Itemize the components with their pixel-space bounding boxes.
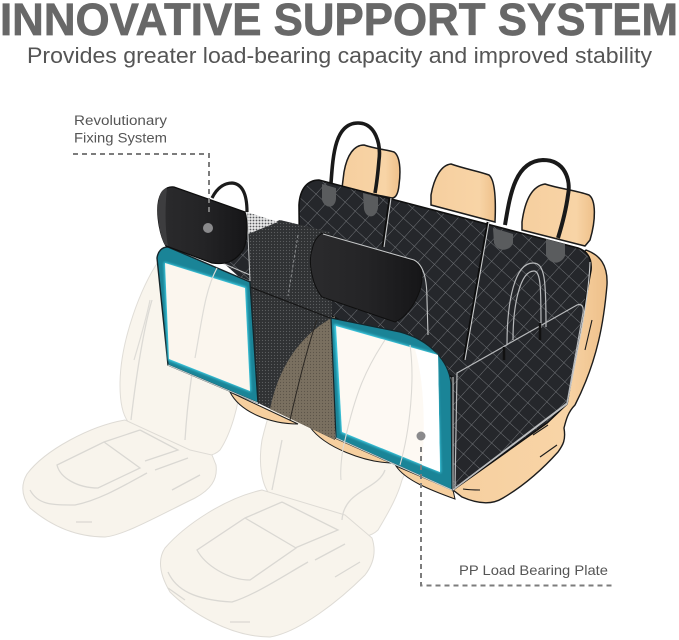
right front seat cushion [160,490,374,637]
callout label: Fixing System [74,130,167,146]
left side panel [157,247,258,403]
right load plate [336,326,440,472]
rear seat illustration [230,123,607,503]
left plate seams [134,268,217,360]
leader line [421,447,613,586]
headrest: right [522,184,594,246]
callout: Revolutionary Fixing System [73,113,213,233]
flap edge lines [222,212,250,281]
left cover side face [158,188,168,246]
right plate seams [341,340,412,480]
quilted back panel [299,180,591,490]
leader dot [416,432,426,440]
handle: left [331,123,379,193]
headrest cover highlight [323,234,428,335]
arched strap [507,263,546,345]
panel seams, light [384,198,590,490]
quilted flap behind left headrest cover [218,226,250,281]
tan strip: left [230,392,298,424]
strap ends [504,323,540,360]
panel seams, dark [383,198,488,360]
mesh stitched seam [288,235,298,296]
pocket outline [455,304,583,488]
headrest: left [342,145,400,198]
cushion stitch marks [463,320,592,490]
callout: PP Load Bearing Plate [416,432,613,586]
left cushion details [30,430,200,522]
ghost seat showing through mesh [270,316,335,440]
panel fold line [250,287,330,318]
left front seat backrest [120,262,245,456]
top mesh strip [247,212,278,234]
front seats, ghosted [23,262,421,637]
right cushion details [168,502,360,622]
left headrest cover handle [212,183,247,212]
right plate glow [334,324,441,473]
subtitle: Provides greater load-bearing capacity and improved stability [27,43,653,68]
left load plate [165,263,250,391]
tan strip: right [396,466,455,499]
strap tabs [322,184,565,263]
hammock mesh and side panels [134,183,452,490]
right side panel [331,318,452,490]
edge line [168,365,452,490]
headrest: centre [431,164,495,222]
leader dot [203,223,213,233]
left plate glow [164,262,251,392]
rear seat base cushion [440,250,607,503]
callout label: PP Load Bearing Plate [459,563,608,578]
handle: right [505,160,569,238]
left front seat cushion [23,420,216,537]
callout label: Revolutionary [74,113,167,128]
tan strip: middle [310,427,391,463]
mesh centre panel [247,220,335,440]
seam through ghost seat [290,320,317,420]
right front seat backrest [260,316,421,538]
left headrest cover [158,187,247,264]
seat backrest seams [131,270,385,520]
leader line [73,154,209,215]
right plate white area [415,349,440,472]
right headrest cover [310,233,422,322]
